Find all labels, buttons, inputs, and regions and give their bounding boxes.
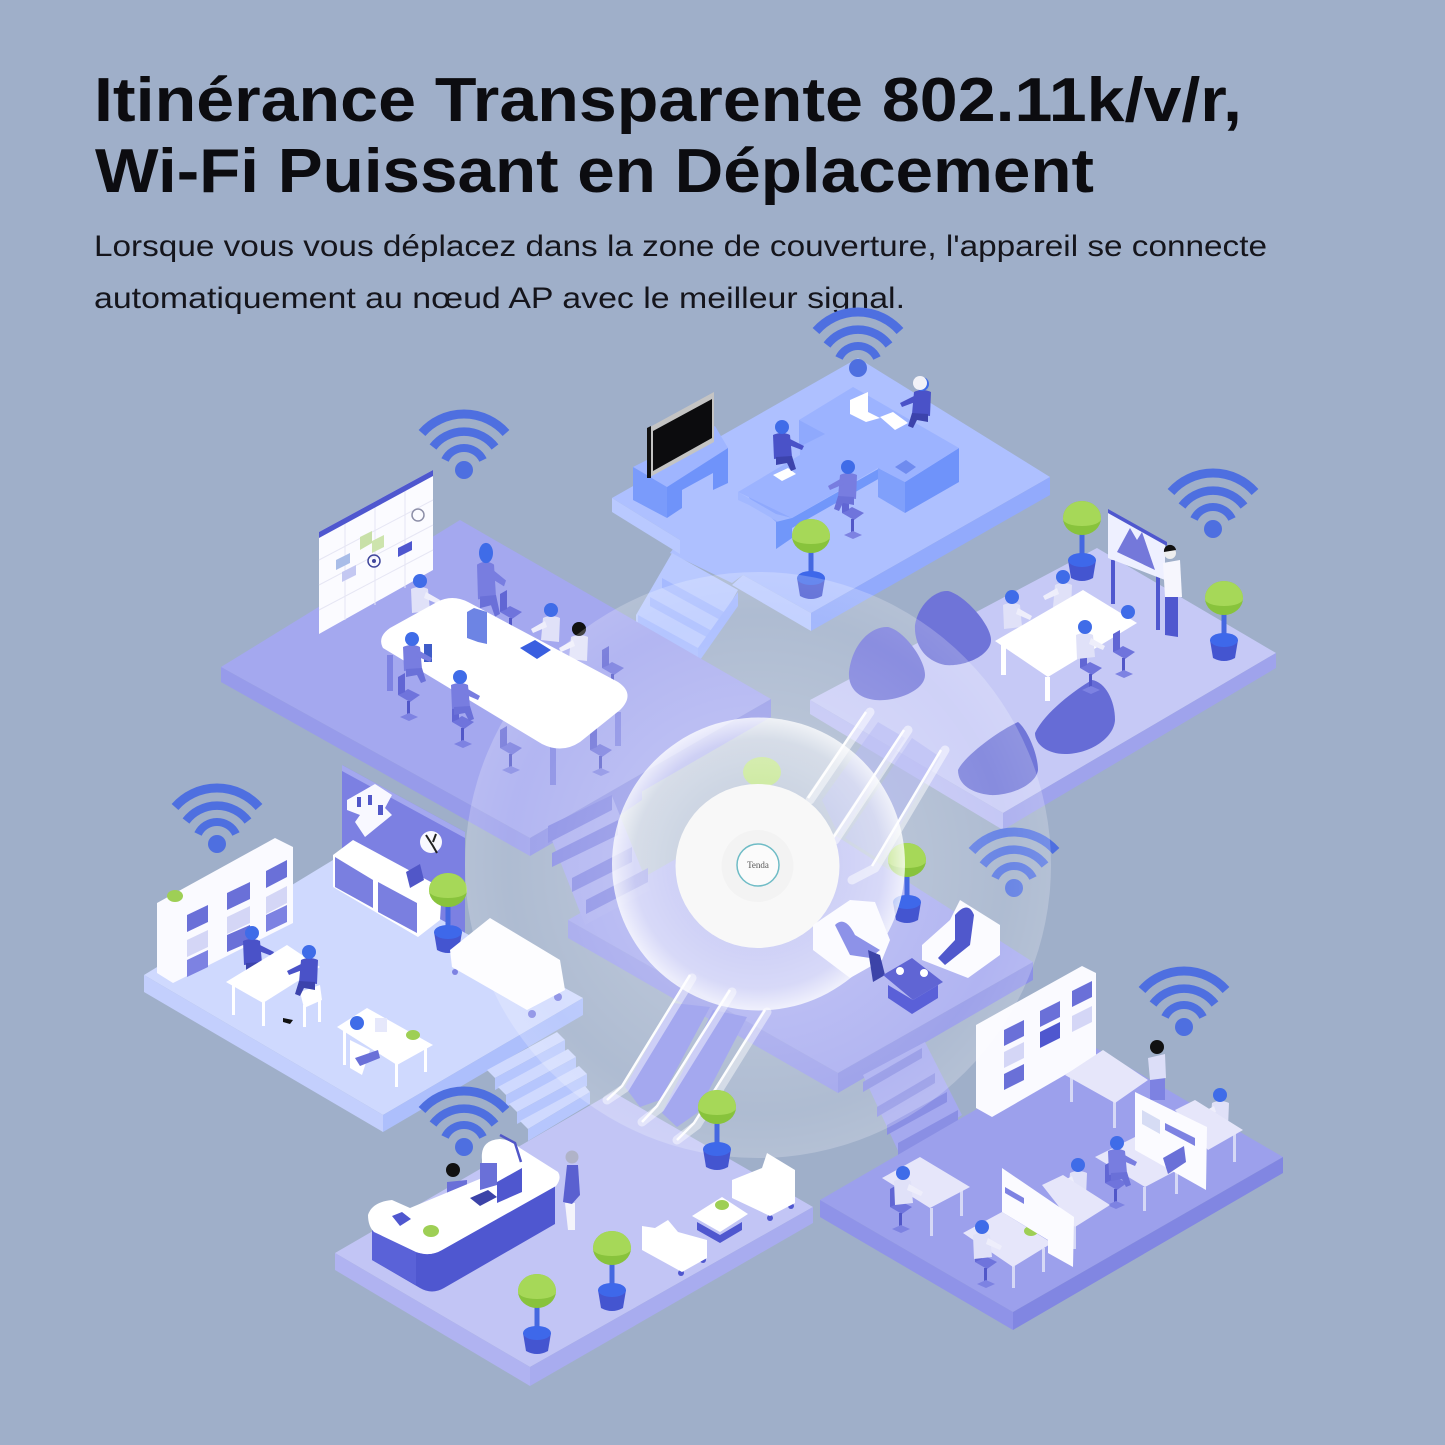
people at table [1076,605,1135,659]
person: woman at desk [243,926,274,977]
wall clock [420,831,442,853]
armchair right [922,900,1000,978]
bookshelf [157,838,293,983]
title [94,66,1242,206]
stairs: office to meeting room [636,553,738,663]
coffee table [883,958,943,1014]
wall board [319,470,433,634]
clipboard [773,468,796,481]
panel: central lounge platform [568,800,1033,1093]
chairs [1080,630,1135,694]
whiteboard [1108,509,1167,630]
bean bag [1035,680,1115,754]
desk back [1065,1050,1148,1128]
bean bag [849,627,925,700]
back wall [342,765,465,935]
people in front [403,632,480,721]
table legs [387,655,621,785]
person: woman standing back [1148,1040,1166,1100]
desk front [963,1212,1052,1288]
person: seated left [773,420,804,471]
armchair left [813,900,890,982]
lounge seating [813,900,1000,1014]
lounge plant [888,843,926,923]
coverage circle inner [612,718,905,1010]
access point device: Tenda [747,860,769,870]
chair [842,491,864,539]
side table [692,1197,748,1243]
panel: bottom right office [820,966,1283,1330]
wall shelf [347,784,392,837]
plant under coverage [743,757,781,787]
panel: meeting room left [221,470,771,856]
panel: library room [144,765,583,1132]
person: woman at computer [350,1016,380,1075]
partition front [1002,1168,1074,1267]
sofa [732,1153,795,1221]
stairs: meeting room to lounge [548,775,650,925]
plant [1063,501,1101,581]
escalators lower [607,975,767,1140]
people behind table [411,543,588,661]
person: presenter [1163,545,1182,637]
person: seated front [828,460,857,511]
cabinet [333,840,442,937]
description text: automatiquement au nœud AP avec le meilleur signal. [94,282,905,315]
description text: Lorsque vous vous déplacez dans la zone de couverture, l'appareil se connecte [94,230,1267,263]
bookshelf [976,966,1096,1117]
desk left [226,945,320,1026]
chairs [398,590,624,776]
plant [429,873,467,953]
bean bag [958,722,1038,795]
tv screen [647,392,714,478]
desk right [1175,1100,1243,1162]
desk centre [1042,1175,1110,1249]
plant lobby top [698,1090,736,1170]
tv stand [633,426,728,518]
escalators upper [808,712,945,880]
plant [518,1274,556,1354]
person: visitor [563,1150,580,1230]
person: woman far right [1200,1088,1229,1127]
desk left [882,1157,970,1236]
title: Itinérance Transparente 802.11k/v/r, [94,66,1242,135]
people middle [1058,1136,1137,1209]
panel: top office room [612,358,1050,663]
meeting table [381,598,628,749]
sofa [642,1220,707,1276]
sofa [450,918,565,1018]
desk middle [1095,1137,1183,1211]
person: manager [900,376,931,428]
book stack [895,460,916,474]
access point device [676,784,840,948]
stairs: lounge to bottom office [863,1042,962,1158]
reception desk [368,1135,560,1292]
bean bag [915,591,991,665]
panel: bean bag room right [810,501,1276,830]
laptop [850,392,880,422]
person: man on chair [283,945,322,1027]
papers [880,412,908,430]
plant [792,519,830,599]
partition back [1135,1092,1207,1190]
table [995,590,1137,701]
people behind table [1003,570,1072,629]
person: receptionist [446,1163,467,1205]
plant [1205,581,1243,661]
desk [738,387,959,549]
coverage circle outer [465,572,1051,1158]
panel: lobby room [335,1092,813,1386]
wifi icons [175,312,1255,1156]
desk right [337,1008,433,1087]
plant [593,1231,631,1311]
description text [94,230,1267,315]
title: Wi-Fi Puissant en Déplacement [95,137,1094,206]
stairs: library to lobby [487,1032,590,1141]
